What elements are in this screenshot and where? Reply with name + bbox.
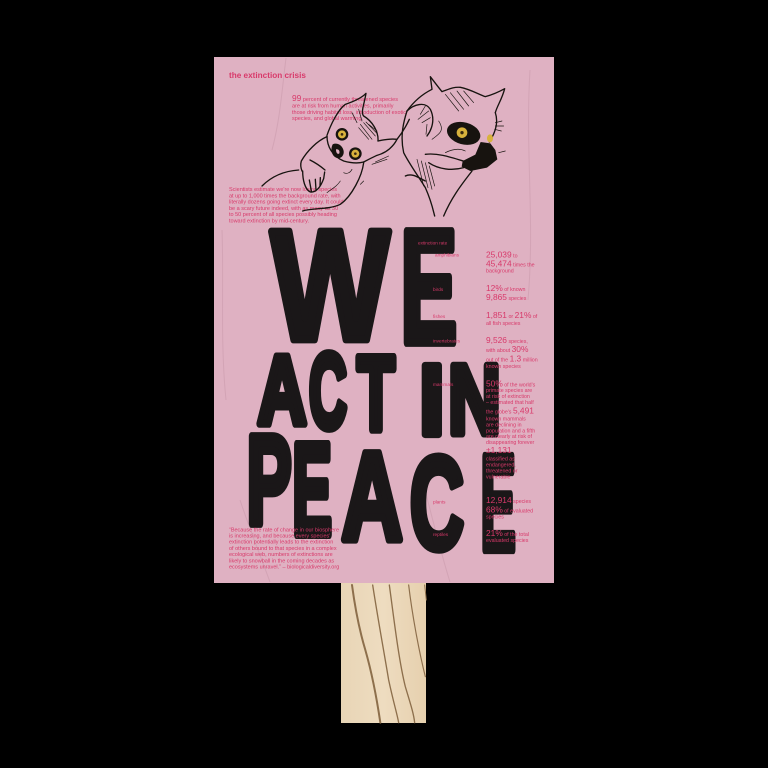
headline: WE ACT IN PEACE: I [419,344,445,456]
category labels: plants [433,499,446,504]
large lemur [397,77,505,216]
text block: quote: ecological web, numbers of extinctions are [229,552,333,558]
headline: WE ACT IN PEACE: A [258,335,307,444]
headline: WE ACT IN PEACE: E [481,427,516,578]
poster wrinkles [222,58,531,582]
statistics column: species [486,514,504,520]
statistics column: 21% of the total [486,528,529,538]
small lemur [262,93,397,211]
statistics column: ±1,131 [486,445,512,455]
headline: WE ACT IN PEACE: T [357,336,395,453]
text block: scientists estimate: to 50 percent of all species possibly heading [229,212,337,218]
statistics column: vulnerable [486,475,510,481]
text block: quote: “Because the rate of change in our biosphere [229,527,339,533]
statistics column: population and a fifth [486,428,535,434]
statistics column: disappearing forever [486,440,535,446]
text block: quote: ecosystems unravel.” – biologicaldiversity.org [229,565,339,571]
text block: quote: of others bound to that species in a complex [229,546,337,552]
headline: WE ACT IN PEACE: C [410,429,464,576]
statistics column: known species [486,364,521,370]
wooden post [341,583,426,723]
text block: scientists estimate: toward extinction by mid-century. [229,218,309,224]
category labels: extinction rate [418,241,448,246]
text block: scientists estimate [229,187,344,224]
text block: scientists estimate: at up to 1,000 times the background rate, with [229,193,341,199]
category labels [418,241,461,537]
text block: scientists estimate: be a scary future indeed, with as many as 30 [229,206,338,212]
text block: 99 percent: species, and global warming. [292,116,363,122]
text block: 99 percent [292,93,406,122]
category labels: mammals [433,382,454,387]
text block: scientists estimate: literally dozens going extinct every day. It could [229,200,344,206]
text block: quote: is increasing, and because every species' [229,534,330,540]
statistics column [486,250,538,544]
statistics column: 1,851 or 21% of [486,310,538,320]
statistics column: 45,474 times the [486,259,535,269]
headline: WE ACT IN PEACE: P [247,410,292,551]
statistics column: classified as [486,457,515,463]
statistics column: at risk of extinction [486,394,530,400]
statistics column: the globe's 5,491 [486,406,534,416]
text block: 99 percent: 99 percent of currently threatened species [292,93,398,103]
statistics column: endangered, [486,462,516,468]
headline: WE ACT IN PEACE: C [309,332,347,450]
illustration: two lemurs [262,77,505,216]
category labels: amphibians [435,253,460,258]
statistics column: – estimated that half [486,400,534,406]
statistics column: primate species are [486,388,532,394]
statistics column: 9,865 species [486,292,527,302]
text block: scientists estimate: Scientists estimate we're now losing species [229,187,337,193]
headline: WE ACT IN PEACE: N [448,345,501,455]
category labels: reptiles [433,532,449,537]
statistics column: 50% of the world's [486,378,536,388]
headline: WE ACT IN PEACE: W [271,198,389,374]
text block: 99 percent: are at risk from human activities, primarily [292,104,394,110]
headline: WE ACT IN PEACE: E [292,416,332,563]
statistics column: 12,914 species [486,495,531,505]
category labels: birds [433,287,444,292]
headline: WE ACT IN PEACE: E [400,198,457,377]
poster panel [214,57,554,583]
category labels: fishes [433,314,446,319]
statistics column: 68% of evaluated [486,504,533,514]
text block: 99 percent: those driving habitat loss, introduction of exotic [292,110,406,116]
statistics column: are clearly at risk of [486,434,532,440]
statistics column: known mammals [486,416,526,422]
statistics column: evaluated species [486,538,529,544]
statistics column: with about 30% [486,344,529,354]
statistics column: 25,039 to [486,250,518,260]
title: the extinction crisis: the extinction crisis [229,71,306,80]
text block: quote [229,527,339,571]
text block: quote: extinction potentially leads to the extinction [229,540,333,546]
statistics column: 12% of known [486,283,525,293]
statistics column: background [486,268,514,274]
headline: WE ACT IN PEACE: A [342,426,403,566]
headline: WE ACT IN PEACE [247,198,516,578]
category labels: invertebrates [433,339,461,344]
text block: quote: likely to snowball in the coming decades as [229,558,334,564]
statistics column: threatened or [486,468,518,474]
statistics column: all fish species [486,321,521,327]
statistics column: are declining in [486,422,522,428]
statistics column: 9,526 species, [486,335,528,345]
statistics column: out of the 1.3 million [486,353,538,363]
